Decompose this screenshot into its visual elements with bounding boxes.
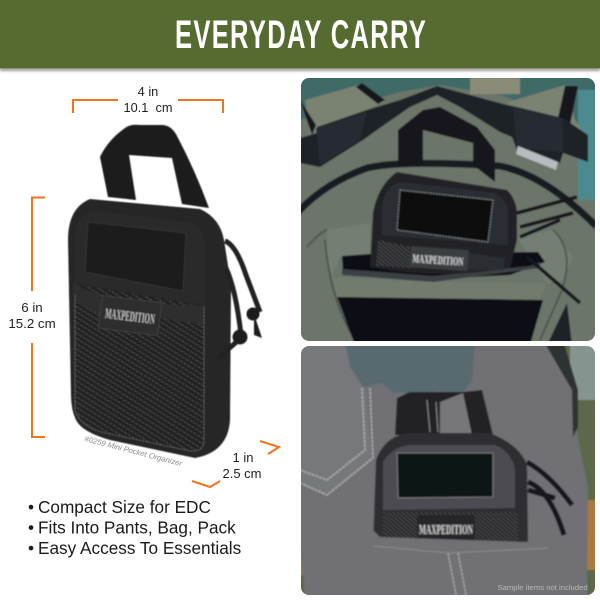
front pocket — [372, 530, 528, 546]
depth dimension: 2.5 cm — [222, 466, 262, 481]
pocket mesh — [383, 512, 518, 544]
velcro patch — [397, 453, 493, 498]
pocket lower panel — [352, 298, 526, 302]
feature bullet list: • — [28, 497, 34, 517]
backdrop — [295, 340, 600, 600]
height dimension: 6 in — [21, 300, 43, 315]
pouch handle — [100, 125, 209, 208]
pouch lower mesh — [376, 240, 410, 268]
handle gap — [440, 393, 472, 435]
depth dimension — [192, 441, 279, 487]
pouch handle — [398, 107, 495, 182]
backpack base — [301, 84, 595, 341]
zipper pulls — [218, 241, 260, 358]
pouch body — [68, 199, 231, 458]
top flaps — [305, 84, 385, 135]
velcro patch — [85, 222, 186, 291]
product caption: #0259 Mini Pocket Organizer — [83, 434, 183, 468]
mesh stitching — [75, 295, 204, 451]
depth dimension: 1 in — [233, 450, 253, 465]
pouch face — [383, 445, 515, 510]
brand tag: MAXPEDITION — [104, 306, 156, 328]
lighter flap panels — [327, 223, 573, 283]
seat pocket seam — [300, 388, 373, 495]
pouch body — [373, 433, 528, 545]
pouch brand tag: MAXPEDITION — [419, 523, 473, 538]
pouch brand tag: MAXPEDITION — [412, 251, 464, 269]
pouch brand tag — [417, 515, 475, 542]
feature bullet list: • — [28, 518, 34, 538]
open zipper pocket — [342, 252, 545, 279]
gloved hand — [346, 346, 474, 394]
zipper cord — [527, 462, 572, 535]
feature bullet list: Compact Size for EDC — [38, 497, 211, 517]
title: EVERYDAY CARRY — [175, 13, 426, 58]
pouch mesh pocket — [73, 284, 205, 451]
feature bullet list: • — [28, 538, 34, 558]
photo: pouch in pants pocket — [295, 340, 600, 600]
sample note: Sample items not included — [498, 583, 588, 592]
height dimension: 15.2 cm — [8, 316, 56, 331]
top carry strap — [300, 86, 588, 167]
side cord knots — [232, 308, 262, 344]
pouch front panel — [74, 211, 206, 305]
pouch body — [370, 172, 517, 274]
width dimension: 10.1 cm — [123, 100, 173, 115]
brand tag — [98, 295, 162, 336]
pouch brand tag — [409, 246, 469, 271]
backdrop foliage — [301, 78, 595, 124]
width dimension: 4 in — [138, 84, 158, 99]
belt strap — [546, 346, 579, 436]
header banner — [0, 0, 600, 71]
feature bullet list: Fits Into Pants, Bag, Pack — [38, 518, 236, 538]
zipper cord — [517, 197, 580, 303]
pouch face — [382, 182, 508, 245]
velcro patch — [397, 190, 493, 242]
strap label — [516, 146, 558, 170]
pouch handle — [395, 390, 493, 435]
height dimension — [8, 198, 56, 437]
feature bullet list — [28, 497, 241, 558]
pocket binding — [73, 284, 205, 325]
product photo: pouch — [68, 125, 262, 458]
photo: pouch in backpack — [295, 70, 600, 350]
strap patches — [316, 108, 563, 165]
pouch band — [468, 254, 504, 270]
handle stitch — [427, 400, 438, 432]
main zipper — [298, 163, 596, 226]
feature bullet list: Easy Access To Essentials — [38, 538, 241, 558]
seam — [307, 230, 567, 340]
trousers — [295, 340, 588, 600]
width dimension — [73, 84, 223, 115]
